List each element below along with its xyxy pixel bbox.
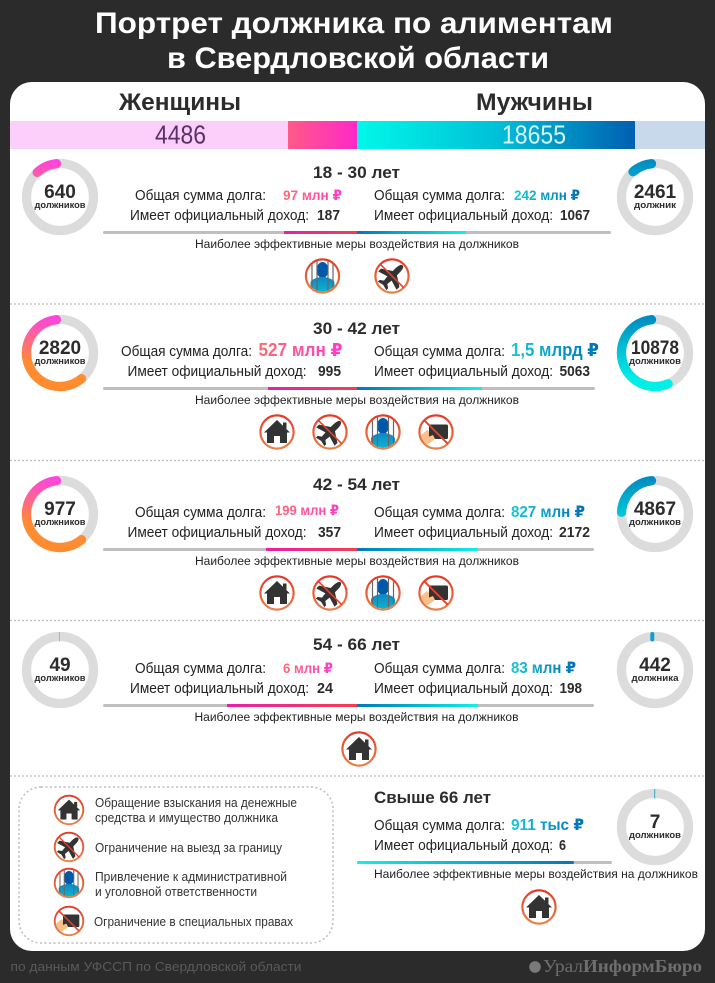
donut: women 30-42 <box>26 320 93 387</box>
age heading: 30 - 42 лет <box>313 319 400 338</box>
donut: men 42-54: 4867 <box>634 499 676 520</box>
legend text: property <box>95 796 297 825</box>
stats: Общая сумма долга: <box>374 343 505 360</box>
stats: 1067 <box>560 208 590 224</box>
legend panel <box>19 787 333 943</box>
stats: 357 <box>318 525 341 541</box>
stats: 198 <box>560 681 582 697</box>
donut: men 54-66: 442 <box>639 655 671 676</box>
donut: women 42-54 <box>26 480 93 548</box>
stats: Имеет официальный доход: <box>374 837 553 854</box>
stats: 5063 <box>560 364 590 380</box>
donut: women 18-30: 640 <box>44 182 76 203</box>
legend text: property: средства и имущество должника <box>95 811 278 825</box>
icon: travel ban <box>311 412 350 451</box>
donut: men over 66: 7 <box>650 812 660 833</box>
icon: licence ban <box>419 415 453 449</box>
logo: Урал <box>543 956 583 976</box>
stats: Имеет официальный доход: <box>374 207 553 224</box>
donut: men 30-42 <box>621 320 688 387</box>
stats: Общая сумма долга: <box>121 343 252 360</box>
donut: men 30-42: 10878 <box>631 338 679 359</box>
donut: women 30-42: должников <box>34 356 86 366</box>
row: over 66 <box>357 788 698 924</box>
icon: property <box>342 732 376 766</box>
title: Портрет должника по алиментам <box>95 7 613 40</box>
title <box>95 7 613 75</box>
stats <box>121 340 599 380</box>
donut: women 54-66 <box>26 632 94 704</box>
legend text: liability: и уголовной ответственности <box>95 885 257 899</box>
icon: property <box>260 576 294 610</box>
donut: men 42-54 <box>622 480 688 548</box>
age heading: 54 - 66 лет <box>313 635 400 654</box>
gender headings <box>118 89 593 116</box>
gender headings: Мужчины <box>476 89 593 116</box>
share bar <box>103 231 611 234</box>
donut: women 54-66: должников <box>34 673 86 683</box>
stats: 827 млн ₽ <box>511 504 585 521</box>
total bar: women vs men: 18655 <box>502 120 566 150</box>
stats: 911 тыс ₽ <box>511 817 584 834</box>
stats: Общая сумма долга: <box>135 660 266 677</box>
stats: 242 млн ₽ <box>514 187 580 203</box>
donut: men 30-42: должников <box>629 356 681 366</box>
icon: property <box>522 890 556 924</box>
logo: ИнформБюро <box>583 956 702 976</box>
legend text: property: Обращение взыскания на денежные <box>95 796 297 810</box>
stats: 83 млн ₽ <box>511 660 576 677</box>
donut: men 18-30: 2461 <box>634 182 677 203</box>
icon: property <box>260 415 294 449</box>
donut: women 42-54: должников <box>34 517 86 527</box>
icon: liability <box>366 415 400 449</box>
share bar <box>103 548 594 551</box>
stats: Общая сумма долга: <box>135 187 266 204</box>
stats: Общая сумма долга: <box>374 817 505 834</box>
stats: Имеет официальный доход: <box>130 207 309 224</box>
legend text: liability: Привлечение к административной <box>95 870 287 884</box>
donut: men over 66 <box>622 789 688 860</box>
icon: travel ban <box>373 256 412 295</box>
icon: liability <box>306 259 339 293</box>
stats: Общая сумма долга: <box>374 187 505 204</box>
age heading: 42 - 54 лет <box>313 475 400 494</box>
row: 42-54 <box>26 475 688 612</box>
donut: men 54-66 <box>622 632 688 704</box>
stats: Общая сумма долга: <box>374 660 505 677</box>
logo <box>529 956 702 976</box>
stats: 24 <box>317 681 333 697</box>
measures caption: Наиболее эффективные меры воздействия на должников <box>195 554 519 568</box>
share bar <box>357 861 612 864</box>
share bar <box>103 387 595 390</box>
donut: women 18-30 <box>26 164 94 230</box>
donut: men 18-30: должник <box>634 200 677 210</box>
stats: Общая сумма долга: <box>374 504 505 521</box>
source note: по данным УФССП по Свердловской области <box>10 959 302 974</box>
row: 54-66 <box>26 632 688 766</box>
age heading: 18 - 30 лет <box>313 163 400 182</box>
stats: Имеет официальный доход: <box>374 363 553 380</box>
stats <box>374 817 584 854</box>
stats: 2172 <box>559 525 590 541</box>
share bar <box>103 704 594 707</box>
legend icon: liability <box>55 869 83 898</box>
stats: Имеет официальный доход: <box>128 524 306 541</box>
stats: Имеет официальный доход: <box>374 680 553 697</box>
donut: men over 66: должников <box>629 830 681 840</box>
gender headings: Женщины <box>118 89 241 116</box>
icon: licence ban <box>419 576 453 610</box>
stats: Имеет официальный доход: <box>374 524 553 541</box>
donut: women 30-42: 2820 <box>39 338 81 359</box>
stats: 527 млн ₽ <box>258 340 342 360</box>
stats: 1,5 млрд ₽ <box>511 340 599 360</box>
icon: travel ban <box>311 573 350 612</box>
stats: 6 <box>559 838 566 854</box>
stats: 995 <box>318 364 341 380</box>
legend icon: travel ban <box>53 830 86 863</box>
measures caption: Наиболее эффективные меры воздействия на должников <box>194 710 518 724</box>
donut: men 18-30 <box>622 164 688 230</box>
icon: liability <box>366 576 400 610</box>
legend icon: licence ban <box>55 907 83 935</box>
stats: 187 <box>317 208 340 224</box>
stats: 6 млн ₽ <box>283 660 333 676</box>
measures caption: Наиболее эффективные меры воздействия на должников <box>195 237 519 251</box>
stats <box>130 187 590 224</box>
stats <box>130 660 582 697</box>
donut: men 42-54: должников <box>629 517 681 527</box>
measures caption: Наиболее эффективные меры воздействия на должников <box>195 393 519 407</box>
row: 30-42 <box>26 319 688 451</box>
donut: men 54-66: должника <box>632 673 680 683</box>
stats <box>128 502 590 541</box>
donut: women 18-30: должников <box>34 200 86 210</box>
stats: Общая сумма долга: <box>135 504 266 521</box>
legend text: liability <box>95 870 287 899</box>
title: в Свердловской области <box>167 42 549 75</box>
legend text: travel ban: Ограничение на выезд за границу <box>95 841 283 855</box>
stats: Имеет официальный доход: <box>128 363 306 380</box>
measures caption: Наиболее эффективные меры воздействия на должников <box>374 867 698 881</box>
stats: 97 млн ₽ <box>283 187 342 203</box>
donut: women 54-66: 49 <box>49 655 71 676</box>
row: 18-30 <box>26 163 688 295</box>
total bar: women vs men: 4486 <box>155 120 206 150</box>
total bar: women vs men <box>10 120 705 150</box>
stats: Имеет официальный доход: <box>130 680 309 697</box>
stats: 199 млн ₽ <box>275 502 339 518</box>
legend icon: property <box>55 796 83 824</box>
donut: women 42-54: 977 <box>44 499 76 520</box>
age heading: Свыше 66 лет <box>374 788 491 807</box>
legend text: licence ban: Ограничение в специальных правах <box>94 915 294 929</box>
